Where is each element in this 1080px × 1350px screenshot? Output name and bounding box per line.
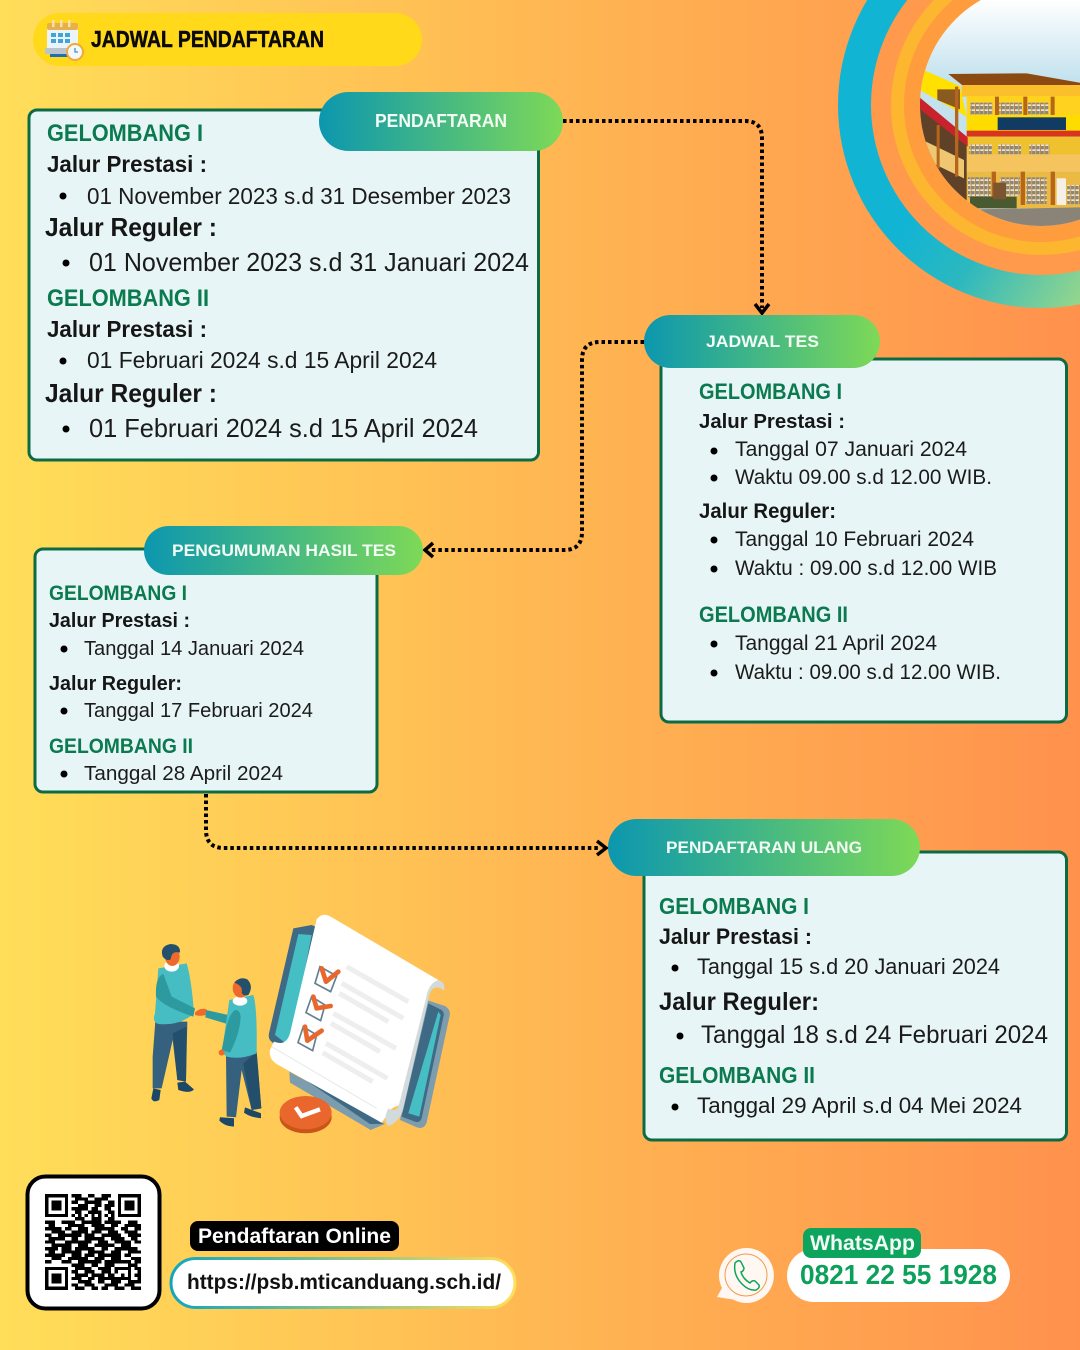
gelombang II re-registration: Tanggal 29 April s.d 04 Mei 2024 [697, 1093, 1022, 1118]
gelombang II dates: 01 Februari 2024 s.d 15 April 2024 [87, 347, 437, 373]
gelombang I re-registration: Jalur Prestasi : [659, 924, 812, 949]
gelombang I re-registration: Tanggal 15 s.d 20 Januari 2024 [697, 954, 1000, 979]
gelombang II results: GELOMBANG II [49, 735, 193, 758]
decorative circle with school photo [838, 0, 1080, 308]
gelombang I dates: GELOMBANG I [47, 120, 203, 147]
gelombang I results: Tanggal 17 Februari 2024 [84, 700, 313, 722]
gelombang II dates: GELOMBANG II [47, 285, 209, 312]
gelombang II re-registration: GELOMBANG II [659, 1062, 815, 1088]
gelombang I dates: Jalur Reguler : [45, 212, 217, 242]
panel: pendaftaran ulang [608, 819, 1066, 1140]
registration url: https://psb.mticanduang.sch.id/ [187, 1271, 501, 1294]
header pill: pengumuman: PENGUMUMAN HASIL TES [172, 541, 396, 560]
header pill: pengumuman [144, 526, 423, 575]
header pill: pendaftaran ulang [608, 819, 920, 876]
illustration: handshake and checklist [151, 915, 450, 1133]
gelombang II results [49, 735, 283, 785]
gelombang I schedule: Tanggal 10 Februari 2024 [735, 528, 974, 551]
gelombang I re-registration [659, 893, 1048, 1049]
figure: taller man [151, 944, 195, 1101]
whatsapp number: WhatsApp [810, 1232, 915, 1255]
whatsapp number [787, 1228, 1010, 1302]
gelombang I schedule: Waktu 09.00 s.d 12.00 WIB. [735, 466, 992, 489]
registration url [171, 1258, 515, 1308]
arrow: pendaftaran to jadwal tes [563, 121, 769, 313]
header pill: jadwal tes [644, 315, 880, 368]
gelombang I schedule: GELOMBANG I [699, 379, 842, 404]
icon: calendar [45, 20, 83, 60]
title badge [33, 13, 422, 66]
title text: JADWAL PENDAFTARAN [91, 26, 324, 52]
gelombang II schedule: Tanggal 21 April 2024 [735, 632, 937, 655]
gelombang I schedule [699, 379, 997, 580]
header pill: pendaftaran ulang: PENDAFTARAN ULANG [666, 838, 862, 857]
gelombang II dates: Jalur Reguler : [45, 378, 217, 408]
gelombang I dates: Jalur Prestasi : [47, 151, 207, 177]
gelombang I schedule: Tanggal 07 Januari 2024 [735, 438, 967, 461]
gelombang II schedule [699, 602, 1001, 684]
whatsapp number: 0821 22 55 1928 [800, 1259, 997, 1290]
gelombang I dates [45, 120, 529, 277]
gelombang I re-registration: GELOMBANG I [659, 893, 809, 919]
gelombang I schedule: Jalur Prestasi : [699, 411, 845, 433]
panel: pengumuman hasil tes [35, 526, 423, 792]
figure: shorter man [195, 978, 261, 1127]
panel: jadwal tes [644, 315, 1066, 722]
gelombang II re-registration [659, 1062, 1022, 1118]
gelombang II dates [45, 285, 478, 443]
icon: whatsapp [717, 1248, 774, 1303]
gelombang I results: Jalur Prestasi : [49, 610, 190, 632]
header pill: jadwal tes: JADWAL TES [706, 332, 819, 351]
gelombang I re-registration: Jalur Reguler: [659, 988, 819, 1016]
gelombang I dates: 01 November 2023 s.d 31 Desember 2023 [87, 183, 511, 209]
gelombang II schedule: Waktu : 09.00 s.d 12.00 WIB. [735, 661, 1001, 684]
gelombang I results: Tanggal 14 Januari 2024 [84, 638, 304, 660]
gelombang I results [49, 582, 313, 722]
icon: coin with check [280, 1096, 332, 1133]
qr code card [28, 1176, 160, 1308]
gelombang I results: Jalur Reguler: [49, 673, 182, 695]
arrow: pengumuman to pendaftaran ulang [206, 794, 606, 855]
header pill: pendaftaran [319, 92, 563, 151]
panel: pendaftaran [29, 92, 563, 460]
gelombang II results: Tanggal 28 April 2024 [84, 763, 283, 785]
arrow: jadwal tes to pengumuman [425, 342, 644, 557]
gelombang I re-registration: Tanggal 18 s.d 24 Februari 2024 [701, 1021, 1048, 1049]
gelombang I dates: 01 November 2023 s.d 31 Januari 2024 [89, 247, 529, 277]
gelombang I results: GELOMBANG I [49, 582, 187, 605]
qr code [45, 1194, 141, 1290]
gelombang II dates: 01 Februari 2024 s.d 15 April 2024 [89, 413, 478, 443]
gelombang I schedule: Waktu : 09.00 s.d 12.00 WIB [735, 557, 997, 580]
gelombang I schedule: Jalur Reguler: [699, 500, 836, 523]
gelombang II schedule: GELOMBANG II [699, 602, 848, 627]
header pill: pendaftaran: PENDAFTARAN [375, 111, 507, 131]
online registration label: Pendaftaran Online [198, 1225, 391, 1248]
gelombang II dates: Jalur Prestasi : [47, 316, 207, 342]
icon: clipboard with checklist [269, 915, 450, 1130]
